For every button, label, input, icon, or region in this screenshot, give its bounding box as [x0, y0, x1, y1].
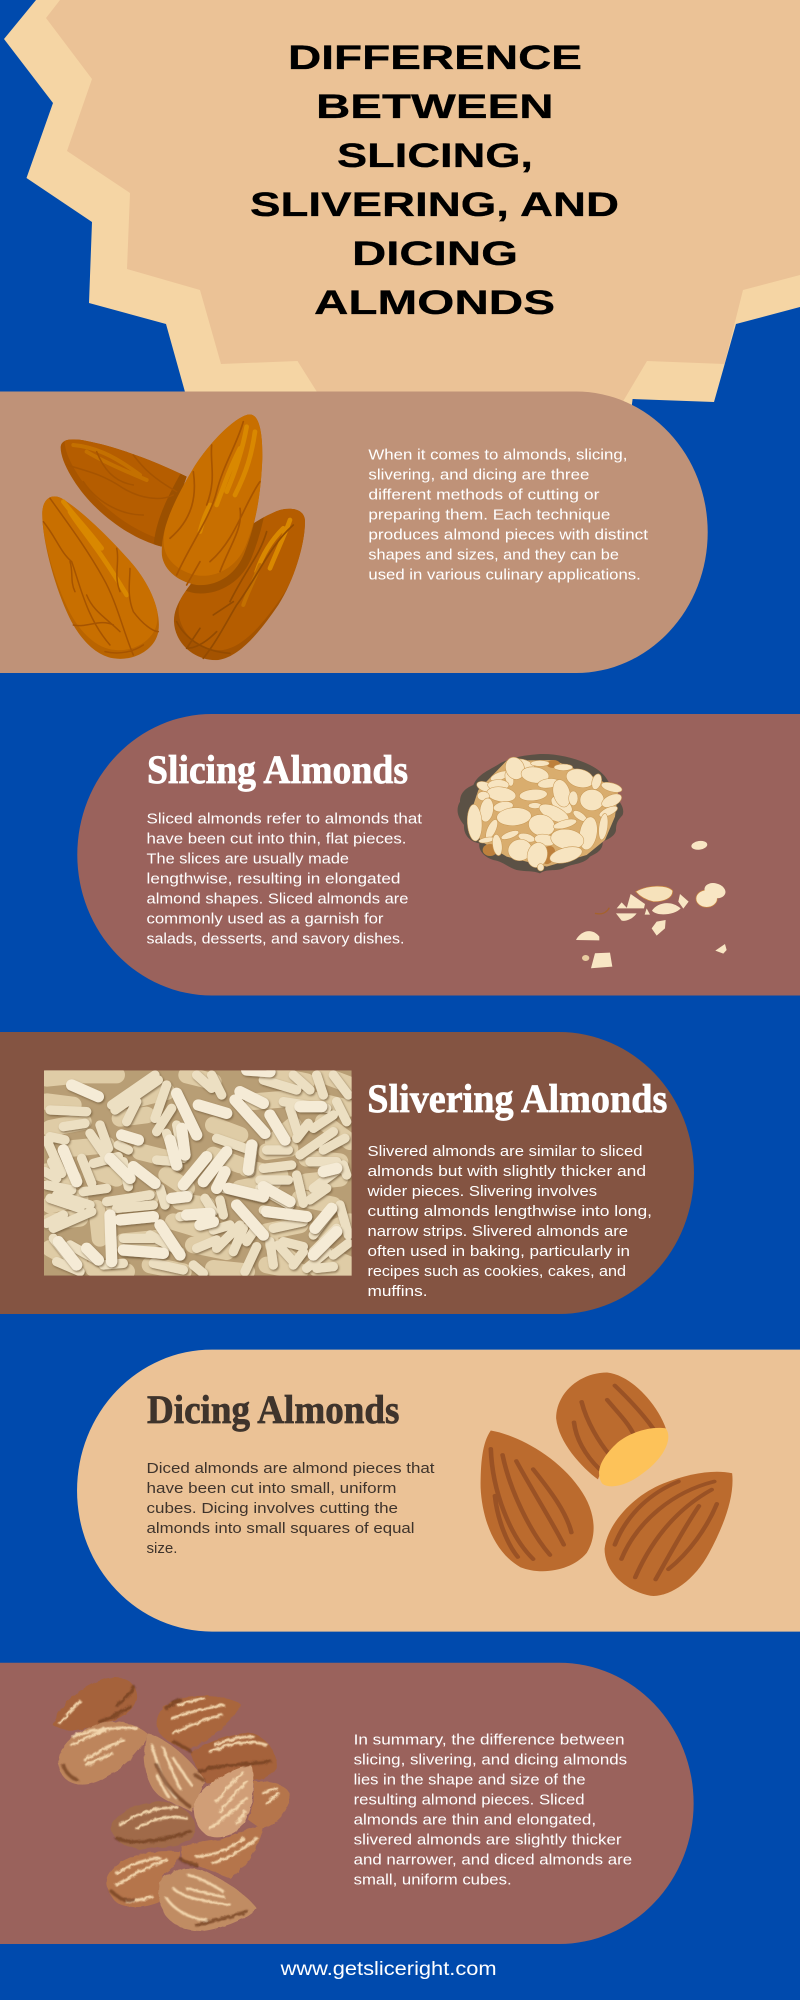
slivering panel background	[0, 1032, 694, 1314]
slivering text: almonds but with slightly thicker and	[368, 1163, 646, 1180]
title: ALMONDS	[314, 284, 555, 322]
summary text	[354, 1732, 632, 1888]
summary text: almonds are thin and elongated,	[354, 1812, 596, 1828]
slicing text: Sliced almonds refer to almonds that	[146, 810, 423, 827]
panel: introduction	[0, 392, 708, 673]
intro text: produces almond pieces with distinct	[368, 527, 649, 544]
title: DIFFERENCE	[288, 39, 582, 77]
slicing text: lengthwise, resulting in elongated	[146, 870, 400, 887]
summary text: slivered almonds are slightly thicker	[354, 1832, 622, 1848]
summary text: resulting almond pieces. Sliced	[354, 1792, 585, 1808]
intro text: slivering, and dicing are three	[368, 467, 589, 484]
panel: summary	[0, 1663, 694, 1944]
slicing text	[146, 810, 423, 947]
slivering text: wider pieces. Slivering involves	[366, 1183, 597, 1200]
panel: slivering almonds	[0, 1032, 694, 1314]
intro text: preparing them. Each technique	[368, 507, 610, 524]
summary text: and narrower, and diced almonds are	[354, 1852, 632, 1868]
title: SLIVERING, AND	[250, 186, 619, 224]
panel: dicing almonds	[77, 1350, 800, 1632]
title: SLICING,	[337, 137, 533, 175]
dicing panel background	[77, 1350, 800, 1632]
heading: dicing almonds: Dicing Almonds	[147, 1387, 400, 1432]
slicing text: almond shapes. Sliced almonds are	[146, 890, 408, 907]
summary panel background	[0, 1663, 694, 1944]
icon: four orange almonds	[40, 405, 310, 665]
summary text: small, uniform cubes.	[354, 1872, 512, 1888]
slivering text: muffins.	[368, 1283, 428, 1300]
icon: watercolor almonds	[53, 1677, 290, 1931]
slivering text: often used in baking, particularly in	[368, 1243, 630, 1260]
heading: slivering almonds: Slivering Almonds	[367, 1076, 667, 1121]
summary text: In summary, the difference between	[354, 1732, 625, 1748]
intro text	[368, 447, 649, 584]
almond slices in dish	[483, 760, 560, 866]
slivering text: narrow strips. Slivered almonds are	[368, 1223, 628, 1240]
header burst: cream back layer	[4, 0, 800, 420]
slivering text: cutting almonds lengthwise into long,	[368, 1203, 652, 1220]
title	[250, 39, 619, 322]
slicing text: have been cut into thin, flat pieces.	[146, 830, 406, 847]
dicing text: cubes. Dicing involves cutting the	[146, 1500, 398, 1517]
title: BETWEEN	[316, 88, 554, 126]
slivering text: recipes such as cookies, cakes, and	[368, 1263, 626, 1280]
heading: slicing almonds: Slicing Almonds	[147, 747, 408, 792]
dicing text: Diced almonds are almond pieces that	[146, 1460, 435, 1477]
intro text: used in various culinary applications.	[368, 567, 641, 584]
header burst: tan front layer	[46, 0, 800, 420]
dicing text: almonds into small squares of equal	[146, 1520, 414, 1537]
slicing panel background	[77, 714, 800, 996]
summary text: lies in the shape and size of the	[354, 1772, 586, 1788]
intro panel background	[0, 392, 708, 673]
intro text: shapes and sizes, and they can be	[368, 547, 619, 564]
scattered flakes	[576, 840, 727, 968]
slivering text: Slivered almonds are similar to sliced	[368, 1143, 642, 1160]
title: DICING	[352, 235, 518, 273]
footer url: www.getsliceright.com	[279, 1959, 497, 1980]
dicing text	[146, 1460, 435, 1557]
slicing text: salads, desserts, and savory dishes.	[146, 930, 404, 947]
icon: flat illustrated almonds	[481, 1372, 733, 1596]
icon: dish of sliced almonds and scattered flakes	[458, 754, 727, 968]
dicing text: have been cut into small, uniform	[146, 1480, 396, 1497]
photo: slivered almonds	[44, 1070, 352, 1276]
slivering text	[366, 1143, 652, 1300]
slicing text: The slices are usually made	[146, 850, 349, 867]
intro text: When it comes to almonds, slicing,	[368, 447, 627, 464]
dicing text: size.	[146, 1540, 178, 1557]
tart dish	[458, 754, 623, 873]
summary text: slicing, slivering, and dicing almonds	[354, 1752, 627, 1768]
slicing text: commonly used as a garnish for	[146, 910, 384, 927]
dish filling base	[468, 760, 618, 867]
panel: slicing almonds	[77, 714, 800, 996]
intro text: different methods of cutting or	[368, 487, 599, 504]
